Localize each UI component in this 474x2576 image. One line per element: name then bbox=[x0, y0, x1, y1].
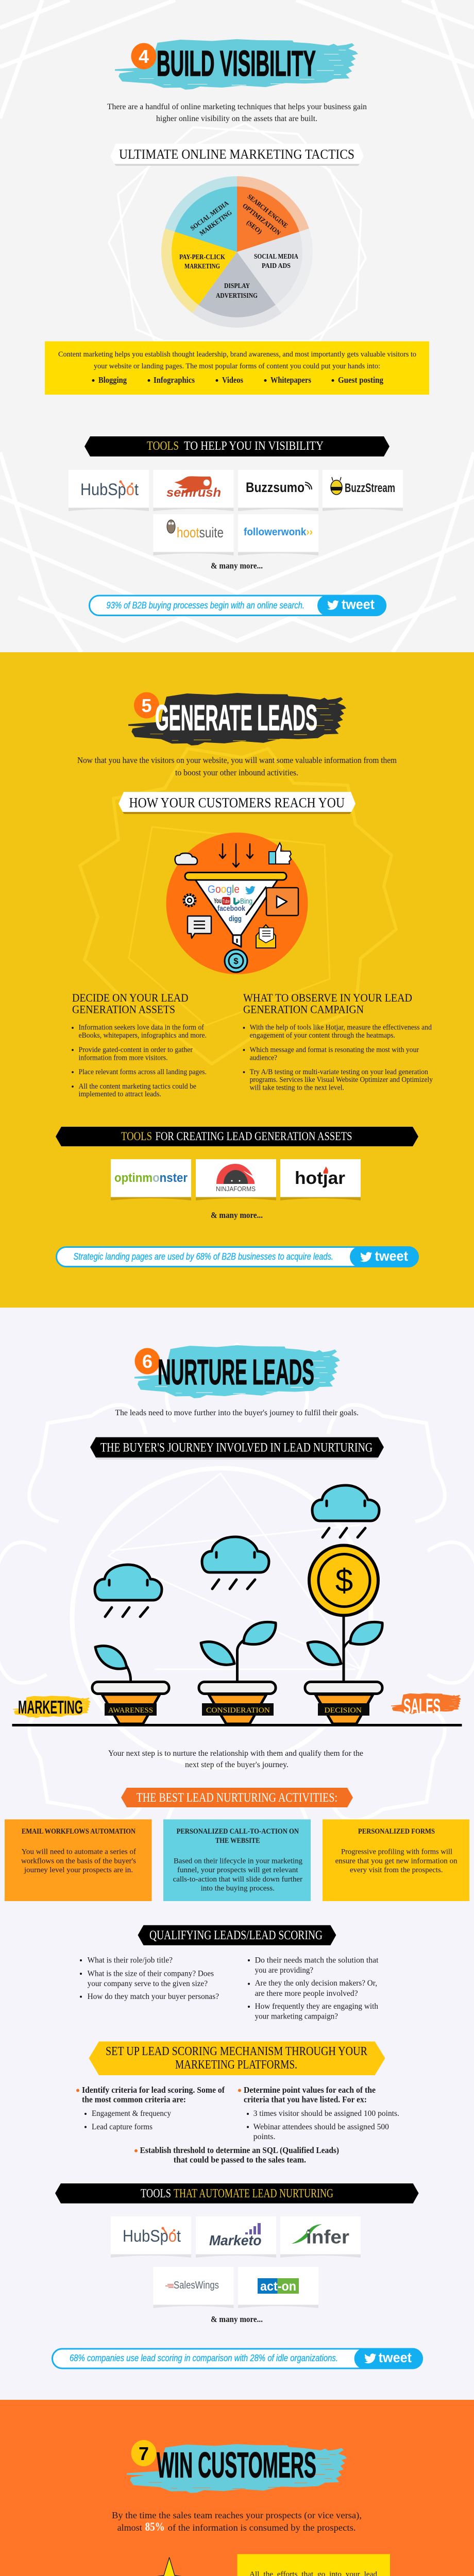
section 4: build visibility bbox=[0, 0, 474, 652]
column: what to observe in your lead generation campaign bbox=[243, 991, 433, 1092]
label: marketing bbox=[13, 1696, 91, 1718]
funnel logos: You bbox=[214, 896, 222, 905]
plant: decision with coin bbox=[305, 1546, 382, 1724]
lead scoring step: determine point values: Determine point values for each of the bbox=[244, 2085, 376, 2095]
label: social media marketing: SOCIAL MEDIA bbox=[189, 199, 230, 232]
ribbon heading: ultimate online marketing tactics: ULTIMATE ONLINE MARKETING TACTICS bbox=[119, 147, 354, 162]
logo: SalesWings: SalesWings bbox=[174, 2280, 219, 2291]
logo: SalesWings bbox=[154, 2267, 234, 2308]
banner: qualifying leads: QUALIFYING LEADS/LEAD SCORING bbox=[149, 1928, 323, 1942]
intro text bbox=[107, 103, 367, 123]
number badge 6 bbox=[135, 1348, 160, 1375]
intro text bbox=[77, 755, 397, 777]
logo: BuzzStream: BuzzStream bbox=[345, 481, 395, 495]
list: qualifying questions right: your marketing campaign? bbox=[255, 2012, 338, 2021]
logo: Hootsuite: hootsuite bbox=[177, 524, 224, 540]
content forms list: Infographics bbox=[154, 375, 195, 385]
icon: video player bbox=[266, 888, 298, 916]
column: what to observe in your lead generation campaign: audience? bbox=[250, 1054, 277, 1062]
lead scoring step: identify criteria: Lead capture forms bbox=[92, 2123, 153, 2131]
funnel body bbox=[185, 873, 286, 947]
logo: SEMrush: semrush bbox=[166, 486, 221, 500]
list: qualifying questions left bbox=[80, 1956, 219, 2001]
tweet callout: 68% lead scoring bbox=[53, 2348, 423, 2369]
column: what to observe in your lead generation campaign: Try A/B testing or multi-variate testing on your lead generation bbox=[250, 1068, 429, 1076]
icon: chat bubble bbox=[188, 916, 211, 938]
plant: consideration bbox=[199, 1622, 276, 1724]
heading: build visibility: BUILD VISIBILITY bbox=[157, 43, 316, 83]
banner: tools that automate lead nurturing: THAT AUTOMATE LEAD NURTURING bbox=[174, 2187, 333, 2200]
logo: HubSpot: HubSpot bbox=[80, 480, 139, 499]
lead scoring step: determine point values: points. bbox=[253, 2132, 275, 2141]
text: next step bbox=[108, 1749, 363, 1769]
label: pay-per-click marketing: PAY-PER-CLICK bbox=[179, 253, 225, 261]
text: next step: next step of the buyer's journey. bbox=[185, 1760, 289, 1769]
logo: Ninja Forms: NINJAFORMS bbox=[216, 1185, 256, 1193]
intro text: almost bbox=[117, 2522, 142, 2533]
column: what to observe in your lead generation campaign: programs. Services like Visual Website Optimizer and Optimizely bbox=[250, 1076, 433, 1084]
card: personalized call-to-action: calls-to-action that will slide down further bbox=[173, 1875, 302, 1884]
column: decide on your lead generation assets: eBooks, whitepapers, infographics and more. bbox=[78, 1031, 207, 1040]
card: personalized forms: every visit from the prospects. bbox=[350, 1866, 443, 1874]
column: what to observe in your lead generation campaign: Which message and format is resonating the most with your bbox=[250, 1046, 419, 1054]
card: personalized forms bbox=[323, 1819, 469, 1901]
banner: tools to help you in visibility bbox=[84, 436, 390, 456]
list: qualifying questions right: Do their needs match the solution that bbox=[255, 1956, 379, 1965]
many more note: & many more... bbox=[211, 561, 263, 571]
column: what to observe in your lead generation campaign: engagement of your content through the heatmaps. bbox=[250, 1031, 395, 1040]
logo: Hotjar bbox=[280, 1159, 361, 1200]
label: social media paid ads: SOCIAL MEDIA bbox=[254, 253, 299, 261]
intro text: There are a handful of online marketing techniques that helps your business gain bbox=[107, 103, 367, 111]
icon: cloud bbox=[175, 853, 197, 865]
icon: star bbox=[148, 2557, 191, 2576]
many more note: & many more... bbox=[211, 1210, 263, 1220]
section 7: win customers bbox=[0, 2400, 474, 2576]
column: decide on your lead generation assets: Place relevant forms across all landing pages. bbox=[78, 1068, 207, 1076]
ribbon heading: buyer's journey: THE BUYER'S JOURNEY INVOLVED IN LEAD NURTURING bbox=[100, 1440, 373, 1455]
card: personalized forms: ensure that you get new information on bbox=[335, 1857, 458, 1865]
card: email workflows automation bbox=[5, 1819, 151, 1901]
tweet callout: 68% lead scoring: 68% companies use lead scoring in comparison with 28% of idle organizations. bbox=[70, 2353, 338, 2363]
icon: arrows bbox=[219, 844, 253, 867]
intro text bbox=[112, 2510, 362, 2533]
column: what to observe in your lead generation campaign: With the help of tools like Hotjar, measure the effectiveness and bbox=[250, 1023, 432, 1031]
ribbon heading: how your customers reach you: HOW YOUR CUSTOMERS REACH YOU bbox=[129, 795, 345, 810]
list: qualifying questions left: What is the size of their company? Does bbox=[88, 1970, 214, 1978]
logo: OptinMonster bbox=[111, 1159, 191, 1200]
label: marketing: MARKETING bbox=[18, 1697, 83, 1718]
tweet callout: 93%: tweet bbox=[342, 597, 375, 612]
content forms list: Videos bbox=[222, 375, 243, 385]
plant: awareness bbox=[92, 1646, 169, 1724]
callout: content marketing bbox=[45, 341, 429, 395]
column: what to observe in your lead generation campaign: will take testing to the next level. bbox=[250, 1084, 344, 1092]
number badge 7 bbox=[131, 2440, 157, 2466]
section 6: nurture leads bbox=[0, 1308, 474, 2400]
plant: awareness: AWARENESS bbox=[108, 1706, 153, 1715]
logo: Followerwonk bbox=[238, 514, 318, 555]
text: next step: Your next step is to nurture the relationship with them and qualify them for the bbox=[108, 1749, 363, 1758]
logo: Infer bbox=[280, 2216, 361, 2258]
logo: Infer: infer bbox=[306, 2227, 349, 2248]
logo: Marketo bbox=[196, 2216, 276, 2258]
list: qualifying questions right: How frequently they are engaging with bbox=[255, 2002, 378, 2011]
intro text: The leads need to move further into the buyer's journey to fulfil their goals. bbox=[115, 1409, 359, 1417]
ribbon heading: how your customers reach you bbox=[118, 792, 356, 814]
funnel logos: digg bbox=[229, 914, 242, 923]
lead scoring step: determine point values bbox=[238, 2085, 399, 2141]
tweet callout: 93%: 93% of B2B buying processes begin with an online search. bbox=[106, 600, 304, 611]
logo: Buzzsumo: Buzzsumo bbox=[246, 480, 304, 495]
tweet callout: 68% landing pages bbox=[57, 1246, 419, 1267]
list: qualifying questions right: Are they the only decision makers? Or, bbox=[255, 1979, 377, 1988]
column: what to observe in your lead generation campaign: WHAT TO OBSERVE IN YOUR LEAD bbox=[243, 991, 412, 1004]
lead scoring step: determine point values: 3 times visitor should be assigned 100 points. bbox=[253, 2109, 399, 2118]
plant: decision with coin: DECISION bbox=[325, 1706, 362, 1715]
callout: content marketing: your website or landing pages. The most popular forms of content you could put your hands into: bbox=[94, 362, 380, 370]
column: decide on your lead generation assets: information from more visitors. bbox=[78, 1054, 168, 1062]
callout: win customers text bbox=[237, 2554, 390, 2576]
card: personalized call-to-action: funnel, your prospects will get relevant bbox=[177, 1866, 298, 1874]
number badge 5 bbox=[134, 692, 159, 718]
lead scoring step: establish threshold: Establish threshold to determine an SQL (Qualified Leads) bbox=[140, 2145, 339, 2155]
label: pay-per-click marketing: MARKETING bbox=[184, 263, 220, 270]
card: email workflows automation: EMAIL WORKFLOWS AUTOMATION bbox=[22, 1827, 136, 1836]
number badge 4 bbox=[131, 43, 157, 69]
heading: generate leads bbox=[128, 692, 346, 745]
intro text: higher online visibility on the assets that are built. bbox=[156, 114, 317, 123]
funnel logos: facebook bbox=[217, 904, 246, 913]
logo: OptinMonster: optinmonster bbox=[114, 1171, 188, 1185]
column: decide on your lead generation assets: DECIDE ON YOUR LEAD bbox=[72, 991, 189, 1004]
lead scoring step: determine point values: Webinar attendees should be assigned 500 bbox=[253, 2123, 389, 2131]
icon: cloud 1 bbox=[95, 1565, 162, 1617]
icon: dollar coin bbox=[225, 950, 247, 972]
banner: set up lead scoring: SET UP LEAD SCORING MECHANISM THROUGH YOUR bbox=[106, 2045, 367, 2058]
intro text: By the time the sales team reaches your prospects (or vice versa), bbox=[112, 2510, 362, 2521]
icon: gear bbox=[184, 894, 195, 906]
icon: twitter bird bbox=[364, 2353, 377, 2363]
logo: Followerwonk: followerwonk›› bbox=[244, 527, 313, 538]
funnel logos: Google bbox=[208, 884, 240, 895]
icon: twitter bird bbox=[327, 600, 339, 610]
banner: tools for creating lead generation assets: TOOLS bbox=[121, 1130, 152, 1143]
banner: tools that automate lead nurturing bbox=[55, 2183, 419, 2204]
pie chart: tactics bbox=[161, 176, 313, 328]
ribbon heading: buyer's journey bbox=[90, 1437, 384, 1460]
tweet callout: 93% bbox=[90, 595, 386, 616]
icon: cloud 3 bbox=[312, 1485, 379, 1537]
label: sales bbox=[391, 1693, 461, 1718]
icon: envelope bbox=[256, 925, 276, 948]
logo: Marketo: Marketo bbox=[209, 2232, 262, 2248]
logo: SEMrush bbox=[154, 470, 234, 511]
logo: Ninja Forms bbox=[196, 1159, 276, 1200]
label: display advertising: ADVERTISING bbox=[216, 292, 258, 300]
tool logos: visibility bbox=[69, 470, 403, 555]
illustration: plants growing bbox=[12, 1485, 462, 1726]
tweet callout: 68% lead scoring: tweet bbox=[379, 2350, 412, 2365]
label: social media paid ads: PAID ADS bbox=[262, 262, 291, 270]
lead scoring step: determine point values: criteria that you have listed. For ex: bbox=[244, 2095, 367, 2105]
number badge 4: 4 bbox=[139, 46, 149, 67]
number badge 6: 6 bbox=[142, 1351, 153, 1372]
list: qualifying questions left: How do they match your buyer personas? bbox=[88, 1992, 219, 2001]
icon: thumbs up bbox=[269, 843, 291, 864]
icon: cloud 2 bbox=[202, 1537, 269, 1589]
tweet callout: 68% landing pages: tweet bbox=[375, 1248, 408, 1264]
banner: set up lead scoring: MARKETING PLATFORMS. bbox=[175, 2058, 297, 2072]
banner: tools for creating lead generation assets bbox=[56, 1127, 418, 1146]
tool logos: lead generation bbox=[111, 1159, 361, 1200]
label: search engine optimization: OPTIMIZATION bbox=[241, 201, 282, 237]
ribbon heading: ultimate online marketing tactics bbox=[110, 144, 364, 166]
card: personalized call-to-action: PERSONALIZED CALL-TO-ACTION ON bbox=[177, 1827, 299, 1836]
tweet callout: 68% landing pages: Strategic landing pages are used by 68% of B2B businesses to acquire leads. bbox=[73, 1251, 333, 1262]
card: personalized forms: Progressive profiling with forms will bbox=[341, 1848, 452, 1856]
funnel logos: Tube bbox=[223, 899, 230, 905]
logo: HubSpot bbox=[111, 2216, 191, 2258]
content forms list: Whitepapers bbox=[270, 375, 311, 385]
column: decide on your lead generation assets: Provide gated-content in order to gather bbox=[78, 1046, 193, 1054]
card: personalized call-to-action: Based on their lifecycle in your marketing bbox=[174, 1857, 302, 1865]
label: sales: SALES bbox=[403, 1694, 441, 1718]
intro text: to boost your other inbound activities. bbox=[175, 768, 298, 777]
logo: BuzzStream bbox=[323, 470, 403, 511]
banner: tools that automate lead nurturing: TOOLS bbox=[141, 2187, 171, 2200]
intro text: Now that you have the visitors on your website, you will want some valuable information from them bbox=[77, 755, 397, 765]
heading: nurture leads: NURTURE LEADS bbox=[158, 1352, 314, 1392]
card: personalized forms: PERSONALIZED FORMS bbox=[358, 1827, 435, 1836]
banner: qualifying leads bbox=[138, 1925, 336, 1945]
card: personalized call-to-action: THE WEBSITE bbox=[215, 1837, 260, 1845]
card: email workflows automation: journey level your prospects are in. bbox=[24, 1866, 133, 1874]
logo: Buzzsumo bbox=[238, 470, 318, 511]
heading: nurture leads bbox=[134, 1345, 340, 1398]
card: email workflows automation: workflows on the basis of the buyer's bbox=[21, 1857, 136, 1865]
list: qualifying questions left: What is their role/job title? bbox=[88, 1956, 173, 1965]
list: qualifying questions left: your company serve to the given size? bbox=[88, 1979, 208, 1988]
logo: Hotjar: hotjar bbox=[295, 1168, 345, 1188]
lead scoring step: identify criteria: Engagement & frequency bbox=[92, 2109, 171, 2118]
intro text: 85% bbox=[145, 2520, 165, 2533]
column: decide on your lead generation assets: Information seekers love data in the form of bbox=[78, 1023, 204, 1031]
logo: HubSpot: HubSpot bbox=[123, 2227, 181, 2245]
many more note: & many more... bbox=[211, 2314, 263, 2324]
banner: set up lead scoring bbox=[89, 2041, 385, 2075]
banner: tools to help you in visibility: TOOLS bbox=[147, 439, 179, 453]
label: display advertising: DISPLAY bbox=[224, 282, 250, 290]
list: qualifying questions right: you are providing? bbox=[255, 1966, 313, 1975]
logo: HubSpot bbox=[69, 470, 149, 511]
lead scoring step: establish threshold bbox=[134, 2145, 339, 2165]
lead scoring step: identify criteria bbox=[76, 2085, 225, 2131]
tool logos: lead nurturing bbox=[111, 2216, 361, 2308]
card: personalized call-to-action: into the buying process. bbox=[201, 1885, 275, 1893]
label: display advertising bbox=[216, 282, 258, 300]
heading: win customers: WIN CUSTOMERS bbox=[157, 2445, 316, 2485]
banner: tools for creating lead generation assets: FOR CREATING LEAD GENERATION ASSETS bbox=[156, 1130, 352, 1143]
icon: dollar coin: $ bbox=[233, 956, 239, 966]
logo: Act-On: act-on bbox=[260, 2279, 296, 2294]
label: search engine optimization: SEARCH ENGINE bbox=[246, 193, 290, 229]
funnel illustration bbox=[166, 833, 308, 974]
number badge 7: 7 bbox=[139, 2443, 149, 2464]
content forms list bbox=[92, 375, 383, 385]
column: decide on your lead generation assets: GENERATION ASSETS bbox=[72, 1003, 175, 1016]
intro text: of the information is consumed by the prospects. bbox=[168, 2522, 356, 2533]
label: pay-per-click marketing bbox=[179, 253, 225, 270]
banner: best lead nurturing activities bbox=[121, 1788, 353, 1807]
ground line bbox=[12, 1724, 462, 1726]
content forms list: Blogging bbox=[98, 375, 127, 385]
label: social media marketing: MARKETING bbox=[198, 209, 233, 237]
column: what to observe in your lead generation campaign: GENERATION CAMPAIGN bbox=[243, 1003, 364, 1016]
card: email workflows automation: You will need to automate a series of bbox=[22, 1848, 136, 1856]
banner: tools to help you in visibility: TO HELP YOU IN VISIBILITY bbox=[184, 439, 324, 453]
illustration: team lifting star bbox=[123, 2557, 215, 2576]
heading: win customers bbox=[127, 2440, 347, 2493]
column: decide on your lead generation assets bbox=[72, 991, 207, 1098]
number badge 5: 5 bbox=[141, 695, 151, 716]
column: decide on your lead generation assets: All the content marketing tactics could be bbox=[78, 1082, 196, 1091]
content forms list: Guest posting bbox=[338, 375, 383, 385]
icon: dollar coin flower bbox=[309, 1546, 378, 1616]
plant: consideration: CONSIDERATION bbox=[206, 1706, 270, 1715]
lead scoring step: identify criteria: Identify criteria for lead scoring. Some of bbox=[82, 2085, 225, 2095]
column: decide on your lead generation assets: implemented to attract leads. bbox=[78, 1090, 161, 1098]
heading: build visibility bbox=[115, 39, 358, 90]
label: social media paid ads bbox=[254, 253, 299, 270]
lead scoring step: establish threshold: that could be passed to the sales team. bbox=[174, 2155, 306, 2165]
funnel logos: Bing bbox=[240, 897, 252, 906]
label: search engine optimization: (SEO) bbox=[245, 218, 264, 235]
logo: Act-On bbox=[238, 2267, 318, 2308]
section 5: generate leads bbox=[0, 652, 474, 1308]
icon: twitter bird bbox=[360, 1252, 373, 1262]
list: qualifying questions right bbox=[248, 1956, 379, 2021]
banner: best lead nurturing activities: THE BEST LEAD NURTURING ACTIVITIES: bbox=[137, 1791, 337, 1805]
logo: Hootsuite bbox=[154, 514, 234, 555]
callout: content marketing: Content marketing helps you establish thought leadership, brand awareness, and most importantly gets valuable visitors to bbox=[58, 350, 416, 359]
icon: dollar coin flower: $ bbox=[335, 1563, 353, 1599]
card: personalized call-to-action bbox=[163, 1819, 311, 1901]
list: qualifying questions right: are there more people involved? bbox=[255, 1989, 358, 1998]
funnel logos bbox=[208, 884, 256, 923]
lead scoring step: identify criteria: the most common criteria are: bbox=[82, 2095, 186, 2105]
